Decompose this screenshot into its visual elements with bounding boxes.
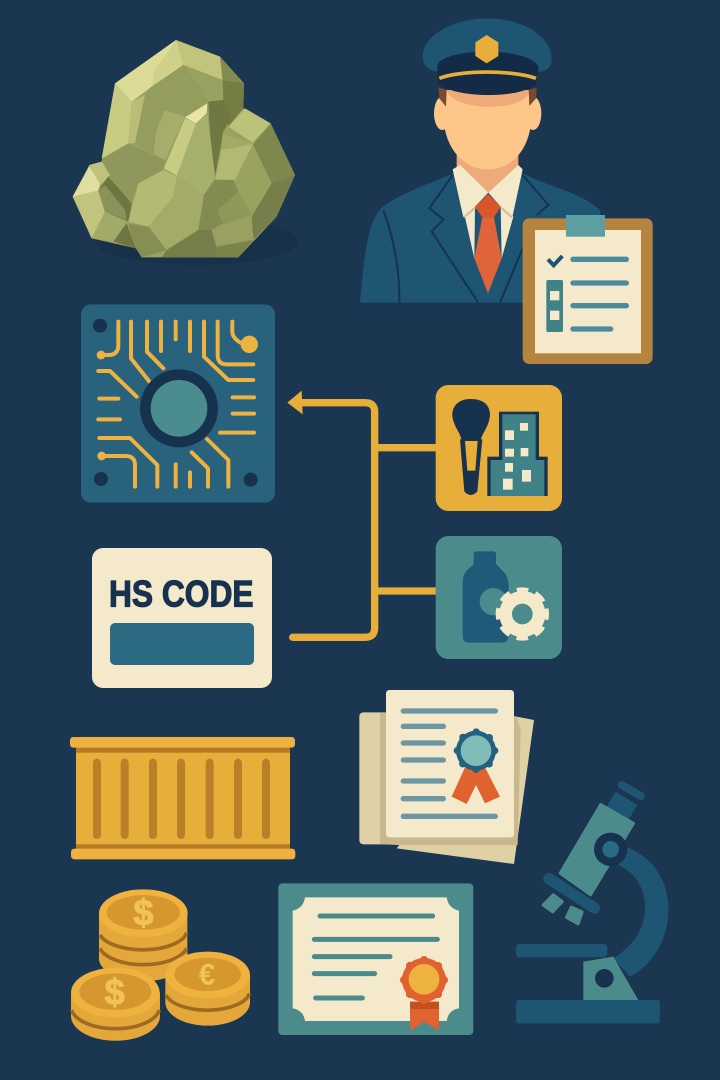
back coin stack	[99, 889, 188, 981]
icon: inspection clipboard	[523, 215, 653, 364]
code field bar	[110, 623, 254, 665]
icon: bottle	[463, 551, 509, 643]
stage	[516, 944, 607, 957]
text lines	[403, 711, 495, 816]
gold traces	[98, 322, 254, 487]
tile background	[436, 385, 562, 511]
top rail	[70, 737, 295, 748]
ribbon	[452, 767, 500, 804]
right coin stack: €	[199, 959, 215, 992]
icon: makeup brush	[452, 399, 490, 495]
panel: chemical and gear tile	[436, 536, 562, 659]
card label: HS CODE	[109, 574, 254, 614]
icon: shipping container	[70, 737, 295, 859]
certificate seal	[402, 958, 446, 1002]
face	[445, 90, 530, 169]
focus joint	[594, 833, 627, 866]
stand hole	[595, 969, 614, 988]
right coin stack	[165, 952, 250, 1026]
jacket seams and lapels	[383, 175, 548, 303]
objective collar	[549, 879, 594, 908]
eyepiece	[622, 785, 641, 796]
back coin stack: $	[133, 892, 153, 933]
paper shadow	[380, 712, 521, 845]
mounting holes	[93, 319, 258, 487]
card background	[92, 548, 272, 688]
back paper left	[359, 712, 426, 844]
chip board	[81, 304, 275, 503]
ears	[434, 97, 541, 130]
clipboard paper	[535, 230, 641, 353]
shirt	[453, 165, 523, 258]
certificate ribbon	[410, 1002, 439, 1031]
back paper right	[397, 716, 534, 864]
connector arrow	[287, 391, 437, 637]
panel: HS code card	[92, 548, 272, 688]
icon: faceted mineral rock	[73, 40, 298, 265]
microscope arm	[613, 846, 668, 977]
bottom rail	[71, 849, 295, 859]
cap gold stripe	[439, 72, 536, 78]
icon: framed certificate	[278, 883, 473, 1035]
objective lenses	[543, 895, 582, 924]
necktie	[474, 194, 502, 293]
cap band	[437, 52, 538, 95]
icon: customs officer	[360, 18, 600, 303]
tile background	[436, 536, 562, 659]
icon: microscope	[516, 785, 668, 1023]
stand	[583, 957, 638, 1000]
checklist lines	[573, 259, 626, 329]
check mark	[548, 256, 562, 265]
certificate text lines	[314, 916, 437, 998]
container body	[76, 748, 290, 848]
icon: building	[487, 412, 548, 496]
front coin stack: $	[105, 972, 125, 1013]
corrugation ribs	[93, 759, 270, 839]
panel: cosmetics and factory tile	[436, 385, 562, 511]
base	[516, 1000, 660, 1023]
cap badge	[475, 35, 498, 63]
neck	[457, 143, 518, 193]
officer jacket	[360, 173, 600, 303]
certificate frame	[278, 883, 473, 1035]
chip core	[140, 369, 218, 447]
icon: stacked certificate documents	[359, 690, 534, 864]
icon: circuit chip	[81, 304, 275, 503]
front paper	[386, 690, 514, 837]
microscope body	[560, 804, 634, 895]
top rail shadow	[76, 747, 290, 753]
icon: gear	[499, 591, 546, 637]
seal	[456, 731, 496, 771]
bottom rail shadow	[76, 844, 290, 850]
trace pads	[97, 336, 258, 460]
hair	[438, 87, 537, 107]
cap crown	[423, 18, 552, 72]
front coin stack	[71, 968, 160, 1041]
checkbox column	[546, 280, 563, 332]
clipboard board	[523, 218, 653, 364]
eyepiece tube	[607, 792, 637, 820]
certificate paper	[293, 897, 459, 1021]
icon: stacked coins	[71, 889, 250, 1041]
clipboard clip	[566, 215, 605, 237]
shadow under cap	[447, 90, 530, 107]
